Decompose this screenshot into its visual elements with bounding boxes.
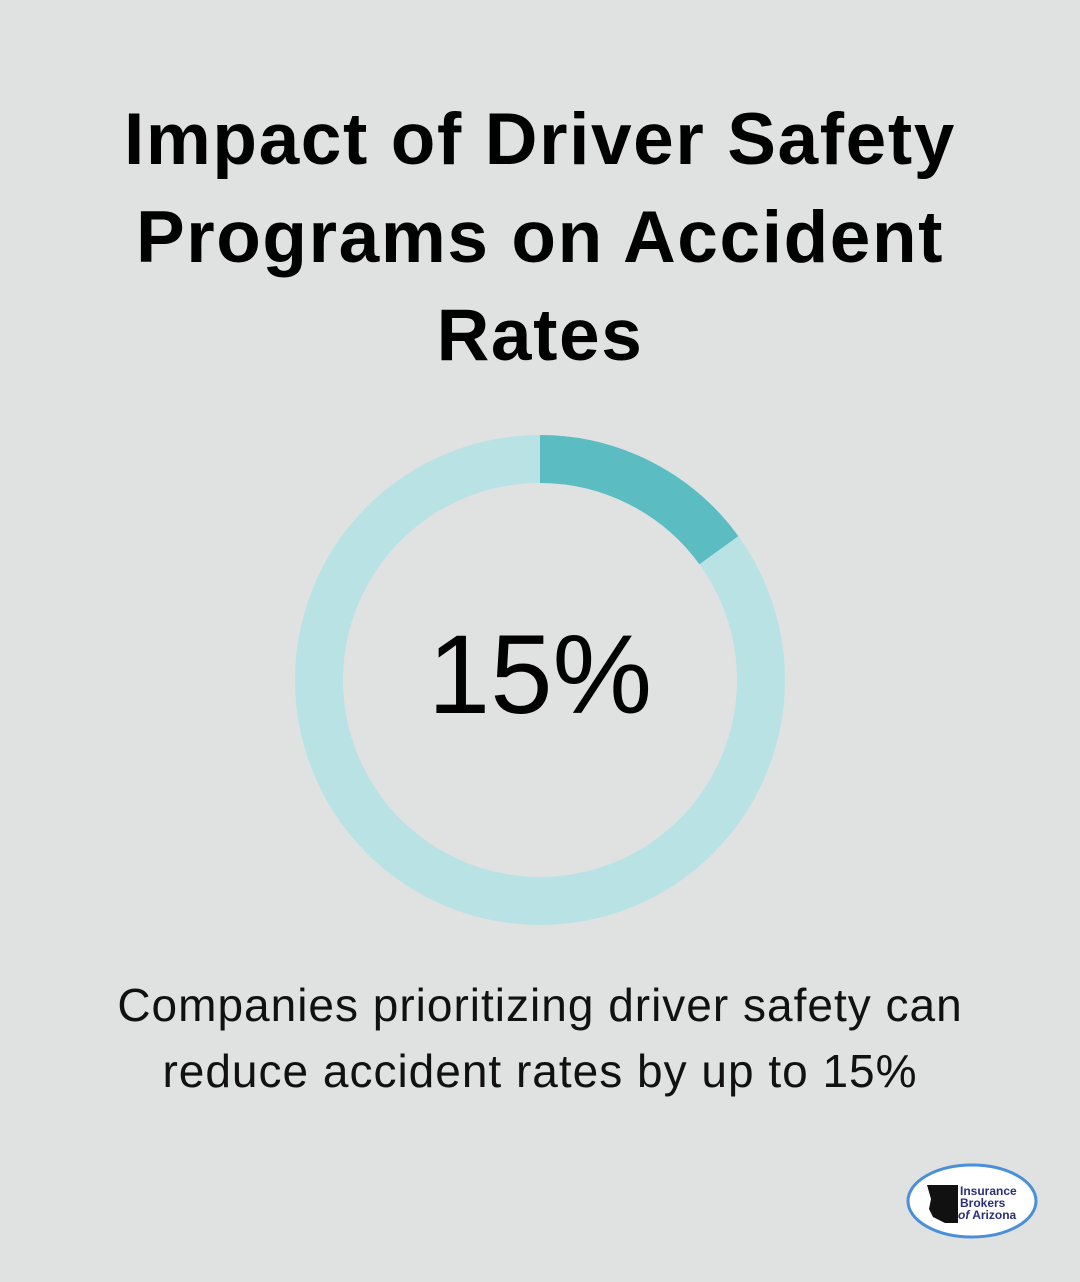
description: reduce accident rates by up to 15%: [162, 1045, 918, 1097]
logo: of Arizona: [958, 1208, 1017, 1222]
logo: Brokers: [960, 1196, 1006, 1210]
title: Programs on Accident: [136, 197, 944, 278]
description: Companies prioritizing driver safety can: [117, 979, 963, 1031]
center value: 15%: [428, 612, 652, 737]
logo: Insurance: [960, 1184, 1017, 1198]
title: Impact of Driver Safety: [124, 99, 956, 180]
title: [124, 99, 956, 376]
title: Rates: [437, 295, 643, 376]
description: [117, 979, 963, 1097]
logo: [906, 1164, 1038, 1238]
